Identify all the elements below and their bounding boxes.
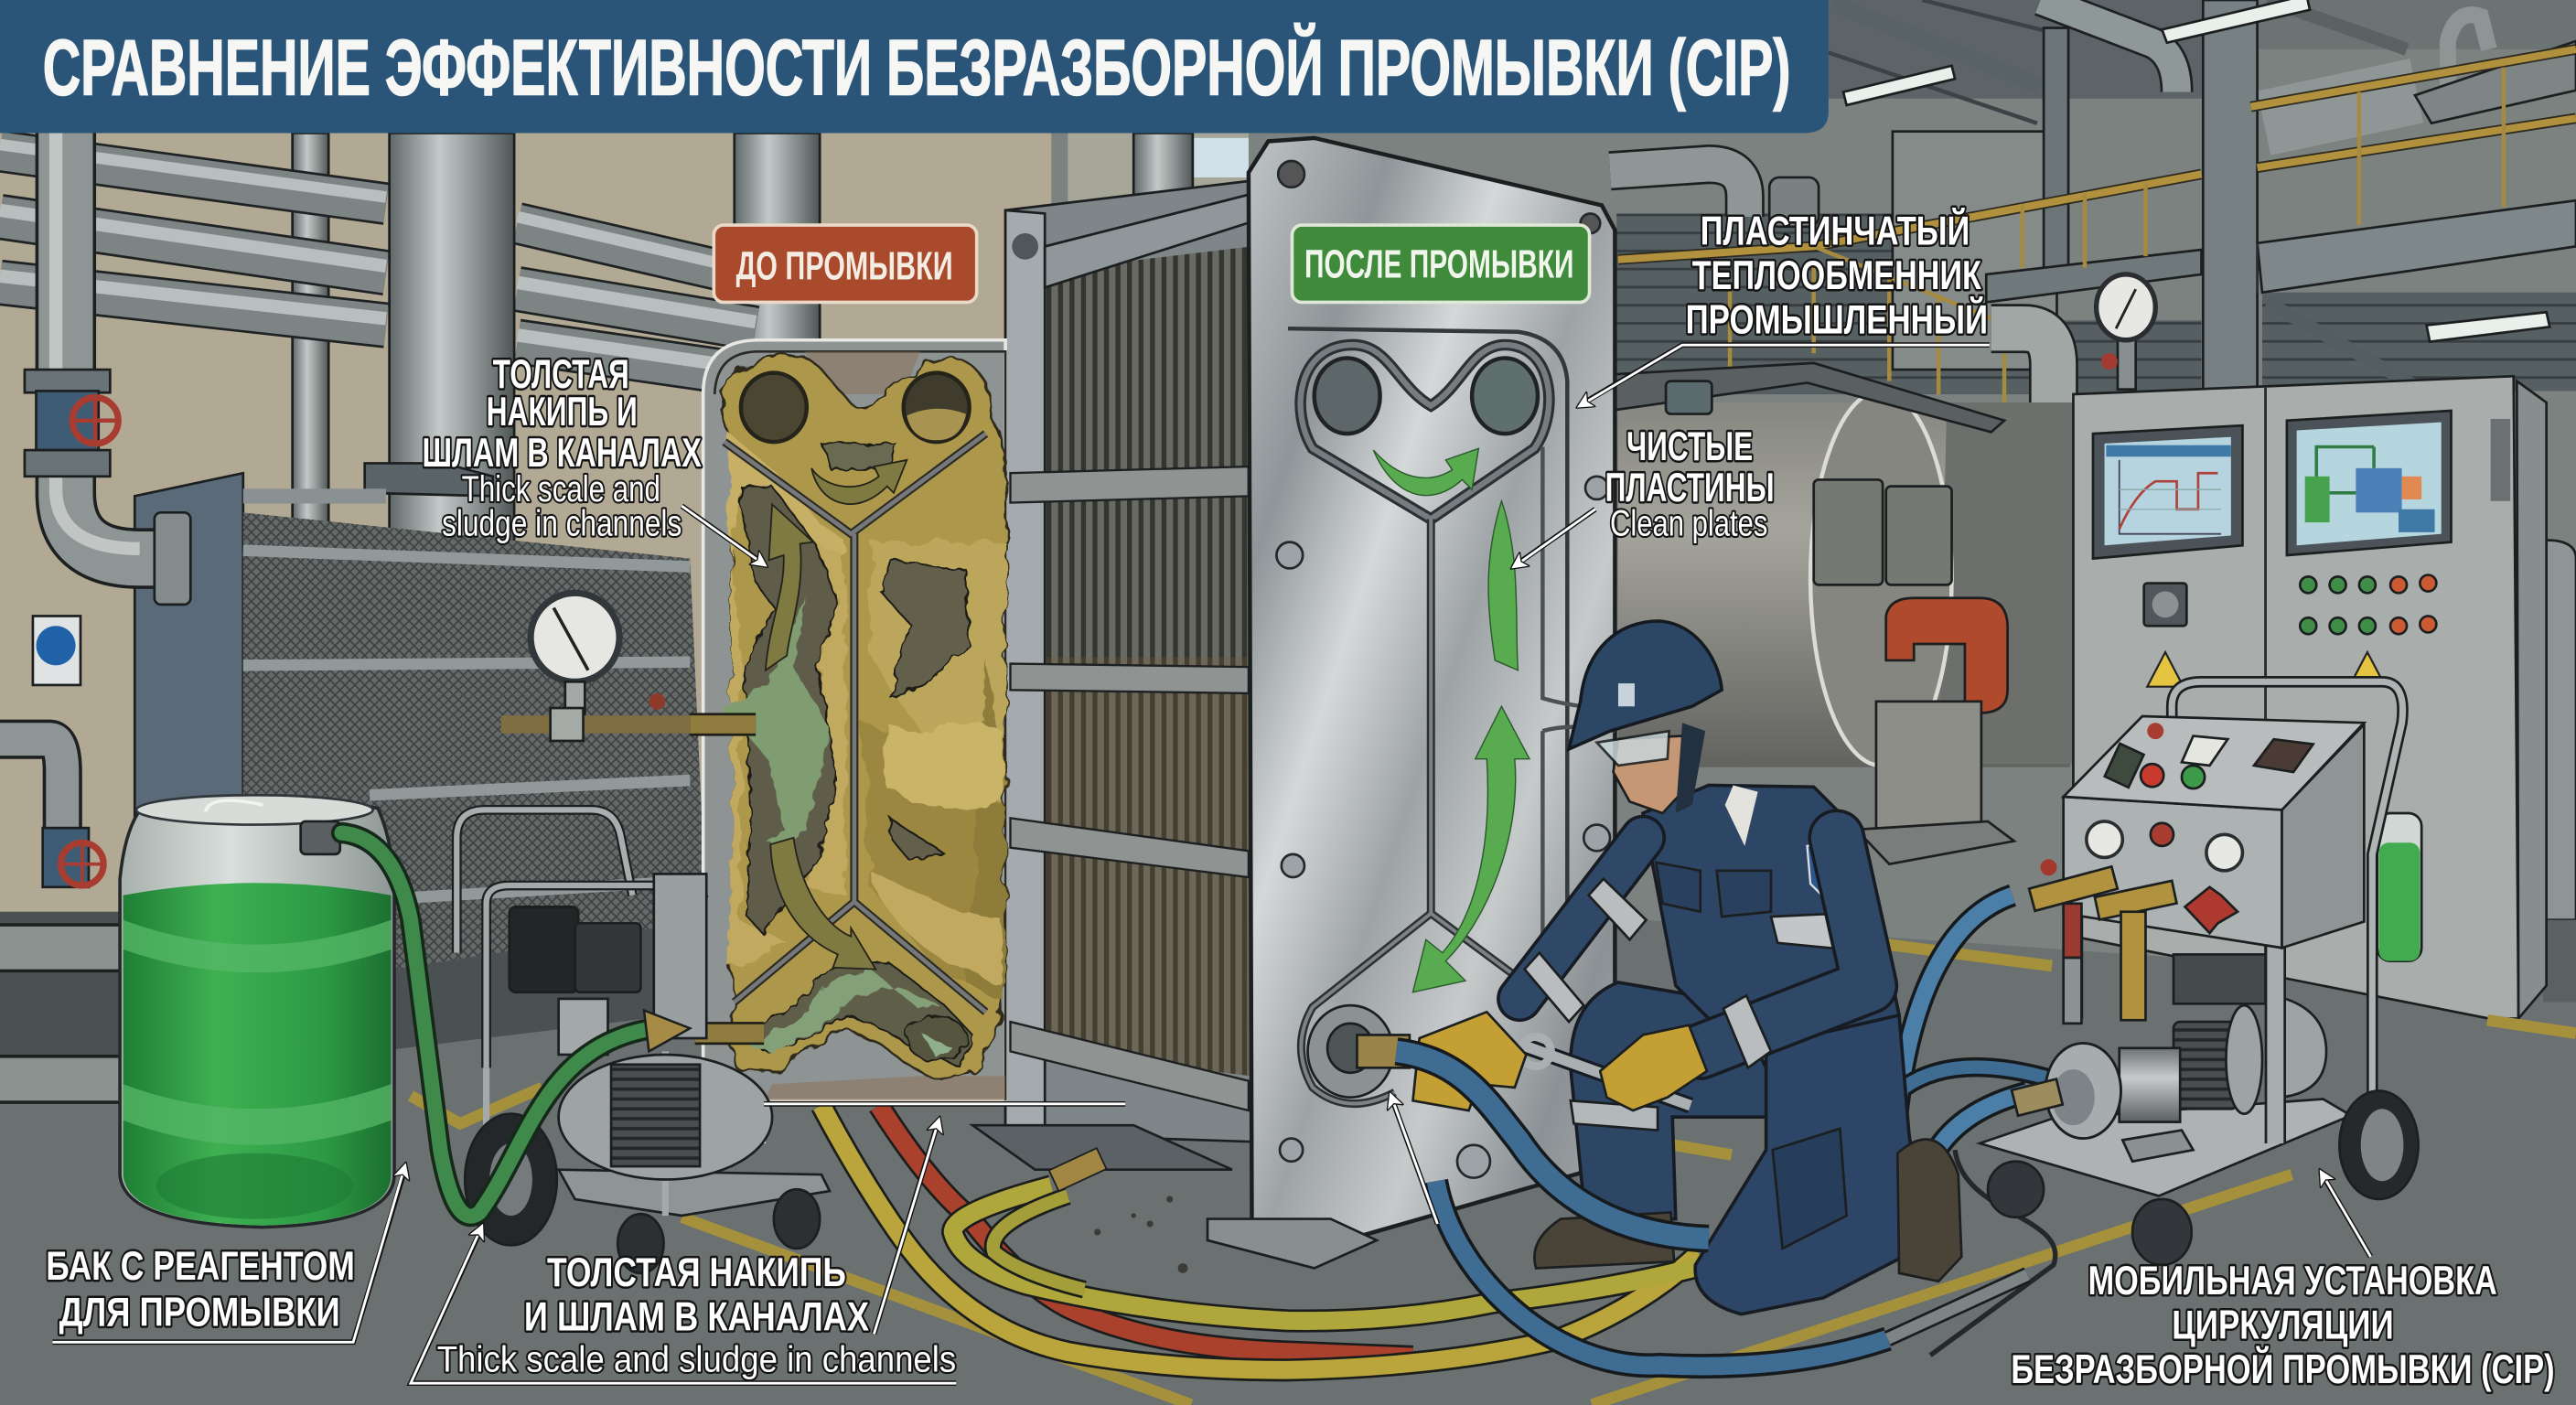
green hose xyxy=(342,833,690,1217)
ducts xyxy=(1610,165,1744,217)
label: mobile CIP unit: ЦИРКУЛЯЦИИ xyxy=(2172,1302,2394,1348)
brass valves xyxy=(2029,866,2176,1024)
label: thick scale upper: Thick scale and xyxy=(462,469,660,509)
riser pipe with red valve and elbow xyxy=(25,133,190,605)
warning signs xyxy=(2147,652,2384,687)
head xyxy=(1614,736,1686,813)
helmet xyxy=(1569,621,1722,749)
badge: after cleaning: ПОСЛЕ ПРОМЫВКИ xyxy=(1304,243,1573,287)
casters xyxy=(617,1214,664,1273)
gasket outline xyxy=(1288,328,1567,937)
blue hoses xyxy=(1436,896,2055,1367)
label: thick scale upper: sludge in channels xyxy=(442,503,682,543)
green flow arrows xyxy=(1373,448,1530,992)
dark flow arrows xyxy=(766,460,907,970)
badge: before cleaning xyxy=(714,225,977,302)
far arm xyxy=(1519,838,1643,999)
label: thick scale upper: ТОЛСТАЯ xyxy=(493,350,629,397)
tray xyxy=(1980,1099,2351,1196)
label: clean plates xyxy=(1511,423,1775,568)
label: thick scale lower: ТОЛСТАЯ НАКИПЬ xyxy=(547,1249,846,1295)
burner xyxy=(1886,598,2008,713)
badge xyxy=(1808,838,1843,900)
lower lobe sludge xyxy=(743,961,972,1067)
label: clean plates: ПЛАСТИНЫ xyxy=(1605,464,1775,510)
label: plate heat exchanger: ПЛАСТИНЧАТЫЙ xyxy=(1701,208,1970,254)
yellow railings xyxy=(1618,49,2576,402)
pockets xyxy=(1656,863,1771,917)
dirt specks xyxy=(1094,1196,1187,1273)
badge: after cleaning xyxy=(1292,225,1590,302)
label: reagent tank: ДЛЯ ПРОМЫВКИ xyxy=(59,1288,340,1335)
label: thick scale upper xyxy=(423,350,767,567)
status lamps xyxy=(2300,575,2436,634)
panel gauges and switches xyxy=(2087,821,2122,857)
large wheel xyxy=(465,1114,557,1245)
front leg and boot xyxy=(1571,982,1791,1219)
gasket xyxy=(724,434,986,1012)
reagent tank xyxy=(120,795,394,1228)
CIP circulation cart xyxy=(1980,681,2421,1265)
wrench xyxy=(1526,1046,1690,1106)
label: thick scale lower xyxy=(411,1104,1125,1383)
control cabinet xyxy=(2073,376,2547,1018)
torso xyxy=(1643,785,1899,1051)
wall pipes xyxy=(0,133,1193,543)
screen: process diagram xyxy=(2287,411,2452,555)
front panel, top and side xyxy=(2064,797,2282,948)
label: clean plates: Clean plates xyxy=(1610,503,1767,543)
pointer: hose connection xyxy=(1390,1092,1437,1224)
label: thick scale upper: НАКИПЬ И xyxy=(487,388,638,434)
label: thick scale lower: Thick scale and sludge in channels xyxy=(437,1340,956,1380)
ceiling lights xyxy=(1843,66,1955,105)
background heat exchanger with gauge xyxy=(134,473,706,970)
lower left pipes xyxy=(0,739,148,1079)
casters and wheel xyxy=(1988,1162,2044,1217)
label: thick scale lower: И ШЛАМ В КАНАЛАХ xyxy=(524,1293,869,1340)
flange fitting xyxy=(1308,1005,1393,1098)
screen: trend chart xyxy=(2093,425,2242,559)
right upper structures: beams, railings, ducts, lights xyxy=(1610,0,2576,444)
ports xyxy=(1315,359,1380,434)
handle xyxy=(2172,681,2403,1092)
dirty plate cutaway xyxy=(690,340,1005,1142)
label: reagent tank xyxy=(46,1164,406,1342)
hose at hands xyxy=(1397,1051,1709,1239)
motor xyxy=(559,1055,772,1179)
near arm xyxy=(1701,838,1870,1051)
boiler with burner xyxy=(1610,363,2073,864)
far right vessel xyxy=(2522,540,2576,1003)
bolts xyxy=(1276,161,1610,1178)
pump and motor xyxy=(2174,954,2266,1003)
badge: before cleaning: ДО ПРОМЫВКИ xyxy=(736,244,953,288)
gloves xyxy=(1412,1012,1526,1110)
hoses on floor: yellow and red xyxy=(821,1106,1699,1370)
label: plate heat exchanger: ТЕПЛООБМЕННИК xyxy=(1692,252,1981,298)
label: mobile CIP unit xyxy=(2011,1170,2555,1392)
label: thick scale upper: ШЛАМ В КАНАЛАХ xyxy=(423,429,702,476)
pump cart xyxy=(456,810,830,1273)
main plate heat exchanger: plate pack xyxy=(972,181,1251,1170)
main plate heat exchanger: front clean plate xyxy=(1208,138,1615,1268)
title banner xyxy=(0,0,1829,133)
label: reagent tank: БАК С РЕАГЕНТОМ xyxy=(46,1242,355,1289)
inlet stubs xyxy=(690,718,756,731)
ports xyxy=(741,373,807,442)
rust staining xyxy=(764,351,1005,1100)
worker xyxy=(1308,621,1961,1314)
bottle xyxy=(2377,813,2421,961)
floor markings xyxy=(411,945,2576,1405)
label: clean plates: ЧИСТЫЕ xyxy=(1626,423,1753,469)
safety sign xyxy=(33,616,80,685)
tray xyxy=(559,1170,830,1216)
frame uprights xyxy=(2270,945,2281,1143)
green wash xyxy=(695,596,830,844)
kneeling leg xyxy=(1695,1015,1926,1314)
label: plate heat exchanger: ПРОМЫШЛЕННЫЙ xyxy=(1686,296,1988,343)
pressure gauge on cabinet xyxy=(2097,274,2155,390)
gold scale deposit xyxy=(720,355,1005,1079)
label: plate heat exchanger xyxy=(1577,208,1990,407)
grey inner sludge patches xyxy=(695,444,972,1067)
